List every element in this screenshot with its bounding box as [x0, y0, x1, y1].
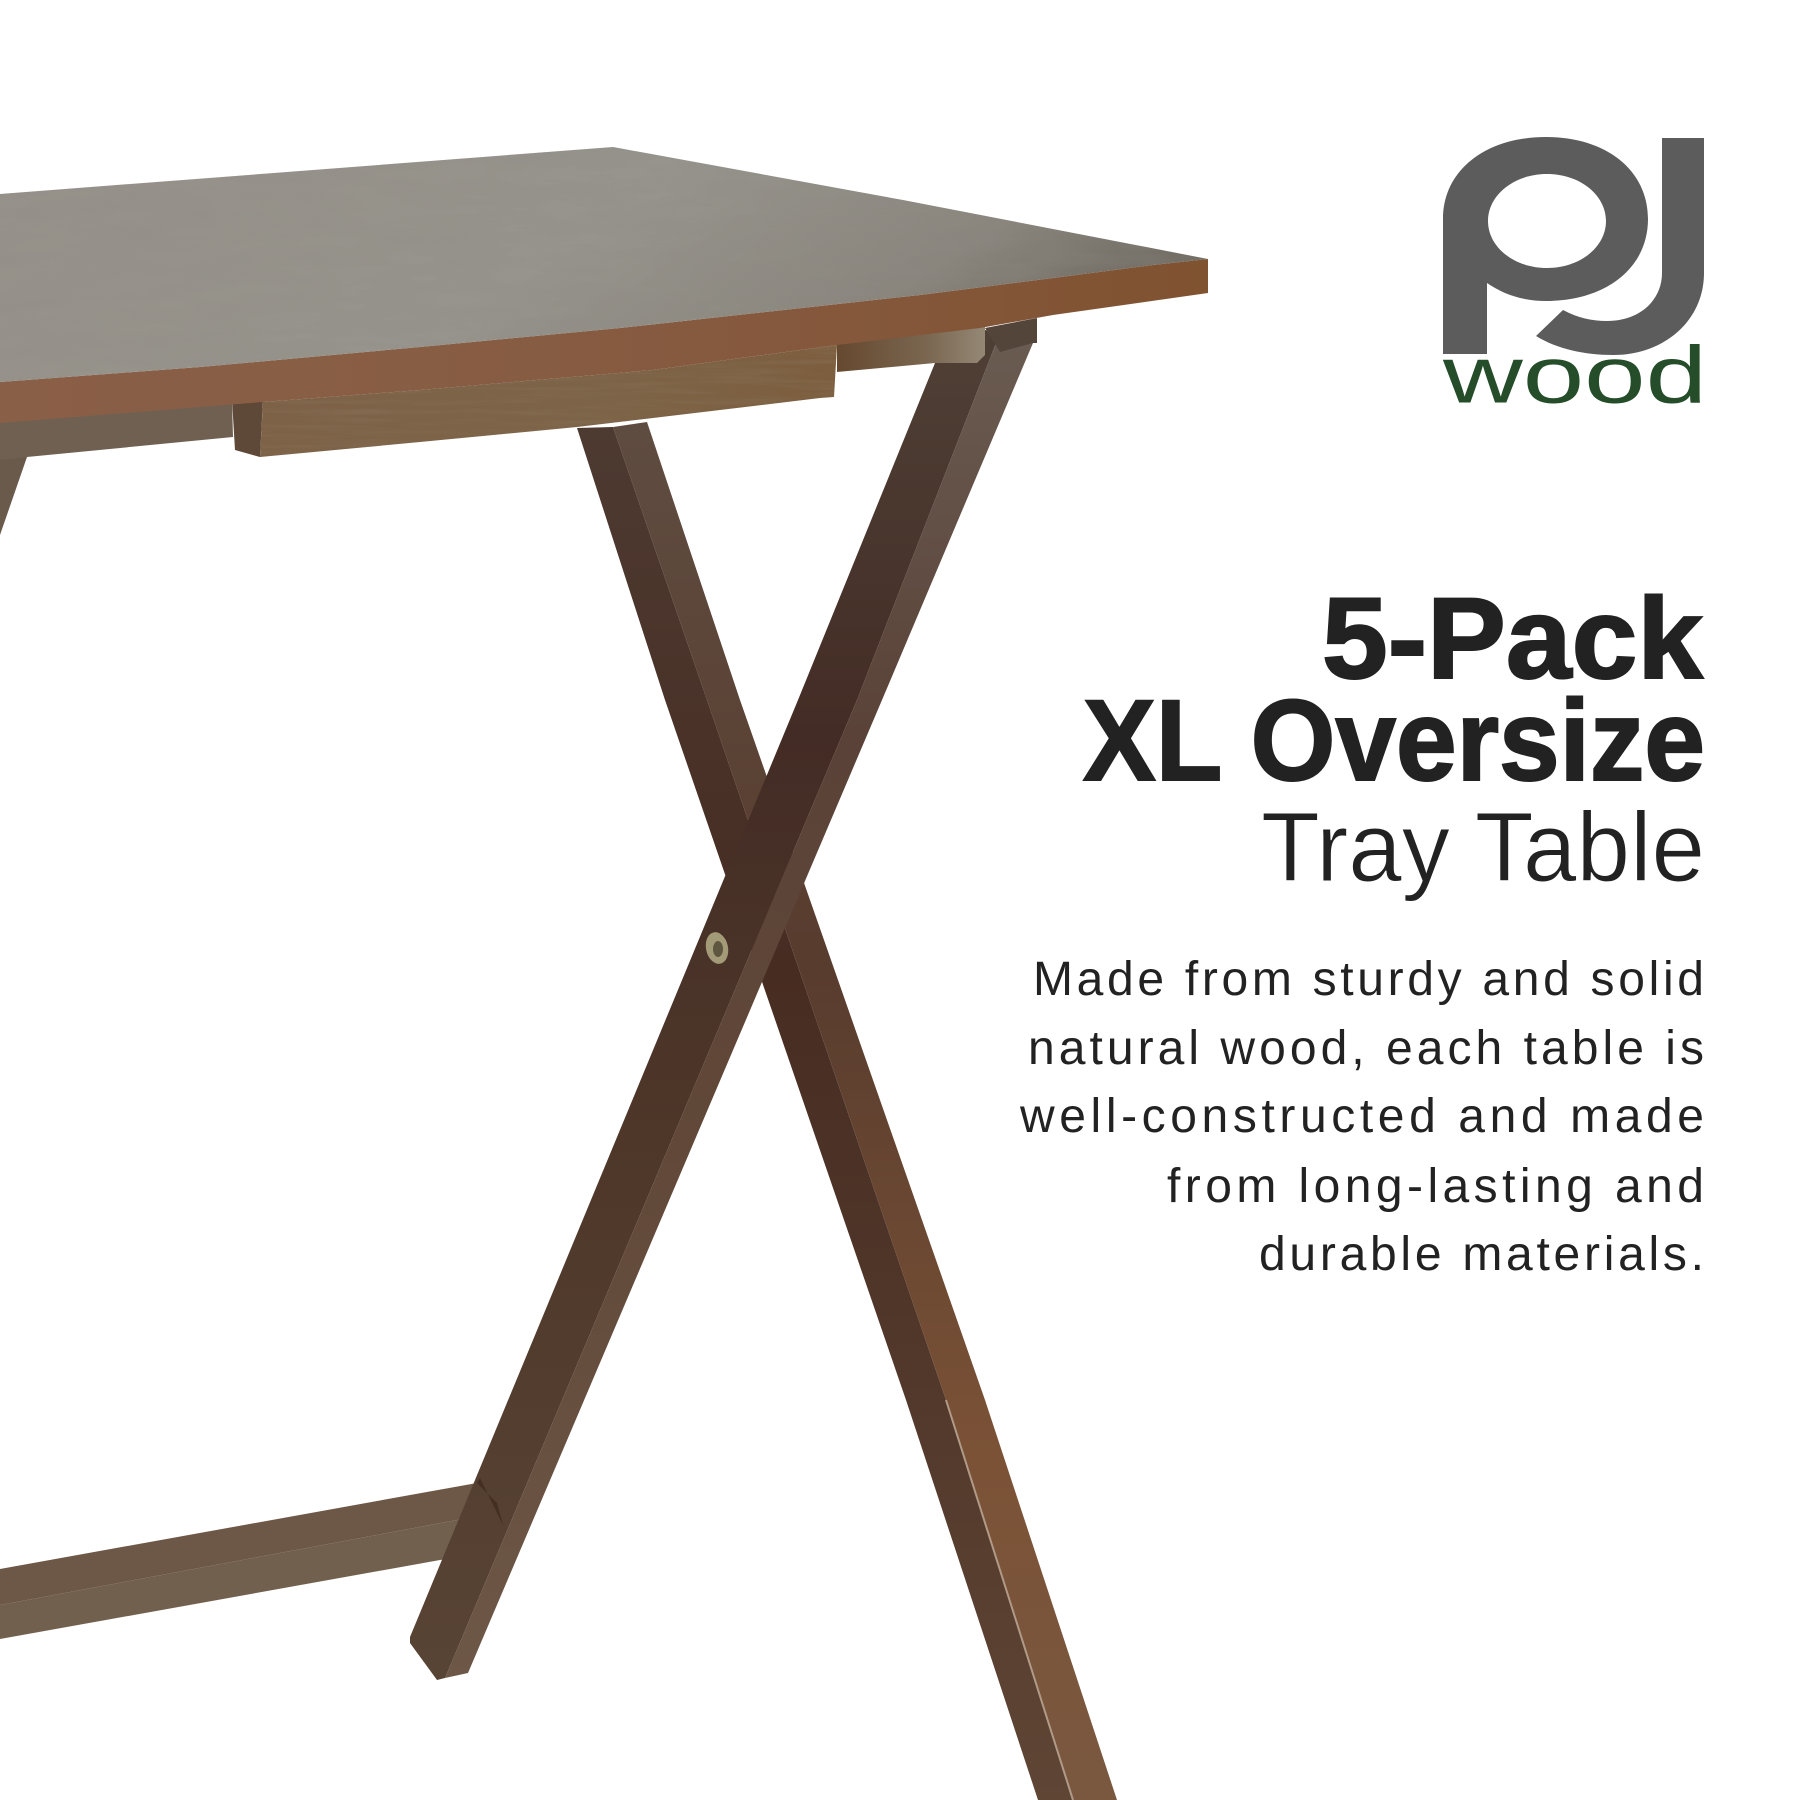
logo letter j	[1536, 138, 1704, 355]
heading line: XL Oversize: XL Oversize	[1083, 677, 1705, 805]
logo wordmark wood: wood	[1442, 330, 1707, 420]
front crossed leg	[410, 320, 1037, 1680]
heading line: Tray Table: Tray Table	[1261, 792, 1705, 902]
left rail under table	[0, 400, 233, 460]
title block	[1083, 575, 1705, 902]
logo: PJ Wood	[1442, 137, 1707, 420]
description text: well-constructed and made	[1019, 1090, 1704, 1143]
right rail under table	[837, 325, 985, 372]
description text: Made from sturdy and solid	[1033, 953, 1704, 1006]
description text: natural wood, each table is	[1028, 1022, 1704, 1075]
logo letter p	[1443, 137, 1648, 354]
description text	[1019, 953, 1704, 1281]
product photo: folding tray table	[0, 140, 1210, 1800]
wooden apron block	[232, 340, 840, 460]
description text: durable materials.	[1259, 1228, 1704, 1281]
far left leg	[0, 420, 40, 535]
pivot bolt	[703, 930, 731, 966]
leg top cap	[985, 318, 1037, 352]
rear crossed leg	[577, 422, 1117, 1800]
table top edge band	[0, 259, 1208, 423]
heading line: 5-Pack: 5-Pack	[1322, 575, 1704, 703]
table top surface	[0, 140, 1210, 390]
bottom crossbar	[0, 1483, 500, 1639]
description text: from long-lasting and	[1167, 1160, 1704, 1213]
